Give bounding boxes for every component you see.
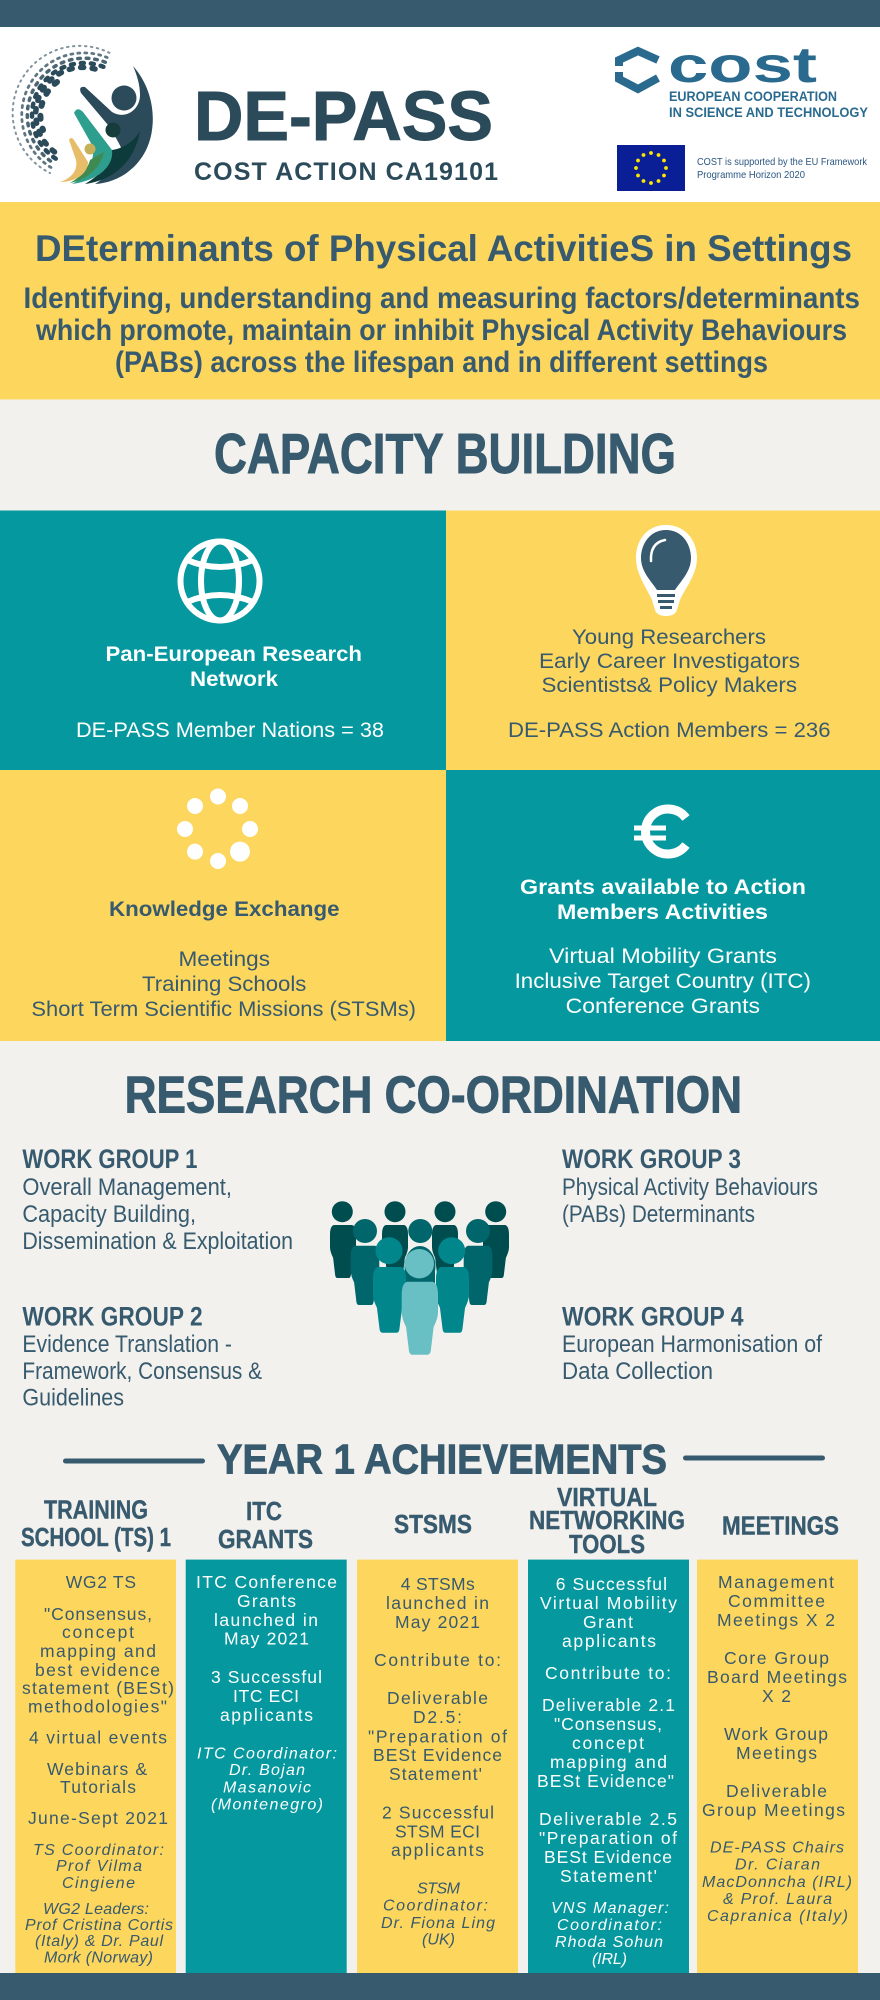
panel: training school column: mapping and — [40, 1641, 156, 1661]
text: audience list: Early Career Investigators — [539, 650, 800, 673]
panel: itc grants column: ITC ECI — [233, 1686, 299, 1706]
panel: stsms column: D2.5: — [413, 1707, 462, 1727]
work group 4 — [562, 1302, 822, 1385]
column heading: training school: TRAINING — [44, 1495, 148, 1525]
EU support statement: Programme Horizon 2020 — [697, 169, 805, 181]
panel: meetings column: Board Meetings — [707, 1667, 847, 1687]
text: audience list: Scientists& Policy Makers — [542, 674, 797, 697]
panel: virtual networking tools column: VNS Manager: — [551, 1900, 669, 1917]
panel: meetings column: Dr. Ciaran — [735, 1857, 820, 1874]
text: exchange activities: Training Schools — [142, 973, 306, 996]
heading: knowledge exchange: Knowledge Exchange — [109, 898, 340, 921]
panel: stsms column: Statement' — [389, 1764, 482, 1784]
icon: group of people — [330, 1201, 509, 1355]
panel: training school column: WG2 TS — [66, 1572, 136, 1592]
work group 3: WORK GROUP 3 — [562, 1144, 741, 1174]
panel: training school column — [15, 1560, 176, 1973]
panel: virtual networking tools column: "Consensus, — [554, 1714, 662, 1734]
text: audience list — [539, 626, 800, 697]
panel: itc grants column: ITC Coordinator: — [197, 1746, 337, 1763]
panel: meetings column: Group Meetings — [702, 1800, 845, 1820]
panel: meetings column: DE-PASS Chairs — [710, 1840, 844, 1856]
work group 4: European Harmonisation of — [562, 1331, 822, 1358]
panel: stsms column: launched in — [386, 1593, 489, 1613]
panel: meetings column — [697, 1560, 858, 1973]
panel: meetings column: Work Group — [724, 1724, 828, 1744]
work group 1: Dissemination & Exploitation — [22, 1228, 293, 1255]
subtitle — [24, 282, 860, 379]
logo wordmark: DE-PASS: DE-PASS — [194, 77, 493, 155]
panel: grants — [446, 770, 880, 1041]
work group 2: Evidence Translation - — [22, 1331, 232, 1358]
panel: stsms column: BESt Evidence — [373, 1745, 502, 1765]
panel: training school column: TS Coordinator: — [33, 1842, 164, 1859]
heading: year 1 achievements — [63, 1436, 825, 1482]
panel: virtual networking tools column: concept — [572, 1733, 644, 1753]
panel: stsms column: 2 Successful — [382, 1803, 494, 1823]
panel: stsms column — [357, 1560, 518, 1973]
panel: stsms column: Deliverable — [387, 1688, 488, 1708]
panel: stsms column: Contribute to: — [374, 1650, 501, 1670]
title: DEterminants of Physical ActivitieS in Settings — [35, 228, 852, 269]
stat: action members: DE-PASS Action Members = 236 — [508, 719, 830, 742]
text: grant list: Conference Grants — [566, 995, 760, 1018]
panel: virtual networking tools column: BESt Evidence" — [537, 1771, 674, 1791]
work group 3: (PABs) Determinants — [562, 1201, 755, 1228]
panel: virtual networking tools column: Deliverable 2.1 — [542, 1695, 675, 1715]
work group 3 — [562, 1144, 818, 1228]
panel: stsms column: Dr. Fiona Ling — [381, 1915, 495, 1932]
heading: year 1 achievements: YEAR 1 ACHIEVEMENTS — [217, 1436, 667, 1482]
panel: stsms column: May 2021 — [395, 1612, 480, 1632]
heading: pan-european research network: Network — [190, 668, 278, 691]
work group 4: WORK GROUP 4 — [562, 1302, 744, 1332]
panel: pan-european research network — [0, 510, 446, 770]
panel: training school column: "Consensus, — [44, 1604, 152, 1624]
heading: grants: Members Activities — [557, 901, 768, 924]
panel: meetings column: Management — [718, 1572, 834, 1592]
panel: virtual networking tools column: 6 Successful — [556, 1574, 667, 1594]
panel: training school column: Prof Vilma — [56, 1858, 142, 1875]
panel: virtual networking tools column: Rhoda Sohun — [555, 1934, 663, 1951]
work group 2: Framework, Consensus & — [22, 1358, 262, 1385]
panel: virtual networking tools column: "Preparation of — [539, 1828, 677, 1848]
column heading: virtual networking tools: TOOLS — [569, 1529, 645, 1559]
work group 2 — [22, 1302, 262, 1412]
column heading: itc grants: ITC — [246, 1496, 282, 1526]
panel: meetings column: MacDonncha (IRL) — [702, 1874, 852, 1891]
work group 2: Guidelines — [22, 1385, 124, 1412]
panel: meetings column: Committee — [728, 1591, 825, 1611]
icon: EU flag — [617, 145, 685, 191]
panel: training school column: best evidence — [35, 1660, 160, 1680]
text: grant list: Virtual Mobility Grants — [549, 945, 777, 968]
column heading: training school: SCHOOL (TS) 1 — [21, 1522, 171, 1552]
panel: virtual networking tools column: (IRL) — [592, 1951, 627, 1968]
panel: virtual networking tools column — [528, 1560, 689, 1973]
panel: stsms column: (UK) — [422, 1932, 455, 1949]
COST full name — [669, 89, 868, 120]
panel: meetings column: Meetings — [736, 1743, 817, 1763]
panel: itc grants column: 3 Successful — [211, 1667, 322, 1687]
work group 3: Physical Activity Behaviours — [562, 1174, 818, 1201]
work group 1 — [22, 1144, 293, 1255]
panel: itc grants column — [186, 1560, 347, 1973]
column heading: itc grants — [218, 1496, 313, 1554]
panel: knowledge exchange — [0, 770, 446, 1041]
panel: virtual networking tools column: Statement' — [560, 1866, 657, 1886]
panel: meetings column: & Prof. Laura — [723, 1891, 832, 1908]
panel: training school column: Cingiene — [62, 1875, 135, 1892]
work group 1: Overall Management, — [22, 1174, 232, 1201]
header panel — [0, 27, 880, 202]
panel: virtual networking tools column: BESt Evidence — [544, 1847, 672, 1867]
panel: training school column: methodologies" — [28, 1696, 167, 1716]
panel: stsms column: applicants — [391, 1840, 484, 1860]
text: audience list: Young Researchers — [572, 626, 766, 649]
panel: training school column: Tutorials — [60, 1777, 136, 1797]
panel: training school column: June-Sept 2021 — [28, 1808, 168, 1828]
bottom bar — [0, 1973, 880, 2000]
panel: young researchers — [446, 510, 880, 770]
panel: itc grants column: Dr. Bojan — [229, 1762, 305, 1779]
panel: meetings column: Meetings X 2 — [717, 1610, 835, 1630]
COST full name: EUROPEAN COOPERATION — [669, 89, 837, 104]
heading: grants — [520, 876, 806, 924]
work group 1: WORK GROUP 1 — [22, 1144, 197, 1174]
column heading: virtual networking tools: VIRTUAL — [557, 1482, 657, 1512]
panel: virtual networking tools column: Deliverable 2.5 — [539, 1809, 677, 1829]
column heading: stsms: STSMS — [394, 1509, 472, 1539]
text: exchange activities: Meetings — [178, 948, 270, 971]
text: exchange activities — [31, 948, 416, 1021]
panel: training school column: statement (BESt) — [22, 1678, 174, 1698]
heading: pan-european research network: Pan-European Research — [106, 643, 362, 666]
heading: research co-ordination: RESEARCH CO-ORDINATION — [125, 1067, 742, 1125]
icon: COST hexagon logo — [619, 51, 658, 89]
panel: training school column: Prof Cristina Cortis — [25, 1917, 173, 1934]
subtitle: (PABs) across the lifespan and in different settings — [115, 346, 768, 379]
icon: euro sign — [634, 809, 686, 854]
icon: ring of dots — [177, 788, 258, 869]
panel: stsms column: Coordinator: — [383, 1898, 488, 1915]
panel: training school column: Webinars & — [47, 1759, 147, 1779]
column heading: meetings: MEETINGS — [722, 1511, 839, 1541]
subtitle: COST ACTION CA19101: COST ACTION CA19101 — [194, 158, 498, 186]
icon: light bulb — [636, 525, 697, 616]
column heading: virtual networking tools: NETWORKING — [529, 1505, 685, 1535]
panel: itc grants column: applicants — [220, 1705, 313, 1725]
column heading: itc grants: GRANTS — [218, 1524, 313, 1554]
work group 4: Data Collection — [562, 1358, 713, 1385]
column heading: virtual networking tools — [529, 1482, 685, 1559]
panel: meetings column: X 2 — [762, 1686, 791, 1706]
panel: training school column: WG2 Leaders: — [43, 1901, 149, 1918]
panel: itc grants column: launched in — [214, 1610, 318, 1630]
panel: meetings column: Capranica (Italy) — [707, 1908, 848, 1925]
panel: stsms column: 4 STSMs — [401, 1574, 475, 1594]
panel: virtual networking tools column: Virtual Mobility — [540, 1593, 677, 1613]
panel: virtual networking tools column: applicants — [562, 1631, 656, 1651]
text: grant list: Inclusive Target Country (ITC) — [515, 970, 811, 993]
work group 2: WORK GROUP 2 — [22, 1302, 203, 1332]
panel: virtual networking tools column: Coordinator: — [557, 1917, 662, 1934]
text: exchange activities: Short Term Scientific Missions (STSMs) — [31, 998, 416, 1021]
panel: virtual networking tools column: mapping and — [550, 1752, 667, 1772]
column heading: training school — [21, 1495, 171, 1552]
panel: itc grants column: May 2021 — [224, 1629, 309, 1649]
top bar — [0, 0, 880, 27]
COST full name: IN SCIENCE AND TECHNOLOGY — [669, 105, 868, 120]
panel: itc grants column: Masanovic — [223, 1780, 311, 1796]
panel: virtual networking tools column: Grant — [583, 1612, 633, 1632]
EU support statement — [697, 156, 868, 181]
text: grant list — [515, 945, 811, 1018]
stat: member nations: DE-PASS Member Nations = 38 — [76, 719, 384, 742]
logo wordmark: cost: cost — [668, 37, 817, 93]
panel: itc grants column: ITC Conference — [196, 1572, 337, 1592]
heading: capacity building: CAPACITY BUILDING — [214, 422, 676, 486]
heading: pan-european research network — [106, 643, 362, 691]
yellow title panel — [0, 202, 880, 400]
panel: training school column: Mork (Norway) — [44, 1950, 153, 1966]
panel: stsms column: STSM — [417, 1881, 461, 1898]
panel: itc grants column: Grants — [237, 1591, 296, 1611]
panel: stsms column: "Preparation of — [368, 1726, 507, 1746]
panel: virtual networking tools column: Contribute to: — [545, 1663, 671, 1683]
panel: meetings column: Deliverable — [726, 1781, 827, 1801]
panel: training school column: (Italy) & Dr. Paul — [35, 1933, 163, 1950]
icon: DE-PASS globe logo — [13, 46, 153, 184]
heading: grants: Grants available to Action — [520, 876, 806, 899]
panel: meetings column: Core Group — [724, 1648, 829, 1668]
icon: globe — [180, 542, 260, 620]
panel: training school column: concept — [62, 1622, 134, 1642]
work group 1: Capacity Building, — [22, 1201, 196, 1228]
panel: stsms column: STSM ECI — [395, 1822, 480, 1842]
panel: itc grants column: (Montenegro) — [211, 1797, 323, 1814]
panel: training school column: 4 virtual events — [29, 1728, 167, 1748]
